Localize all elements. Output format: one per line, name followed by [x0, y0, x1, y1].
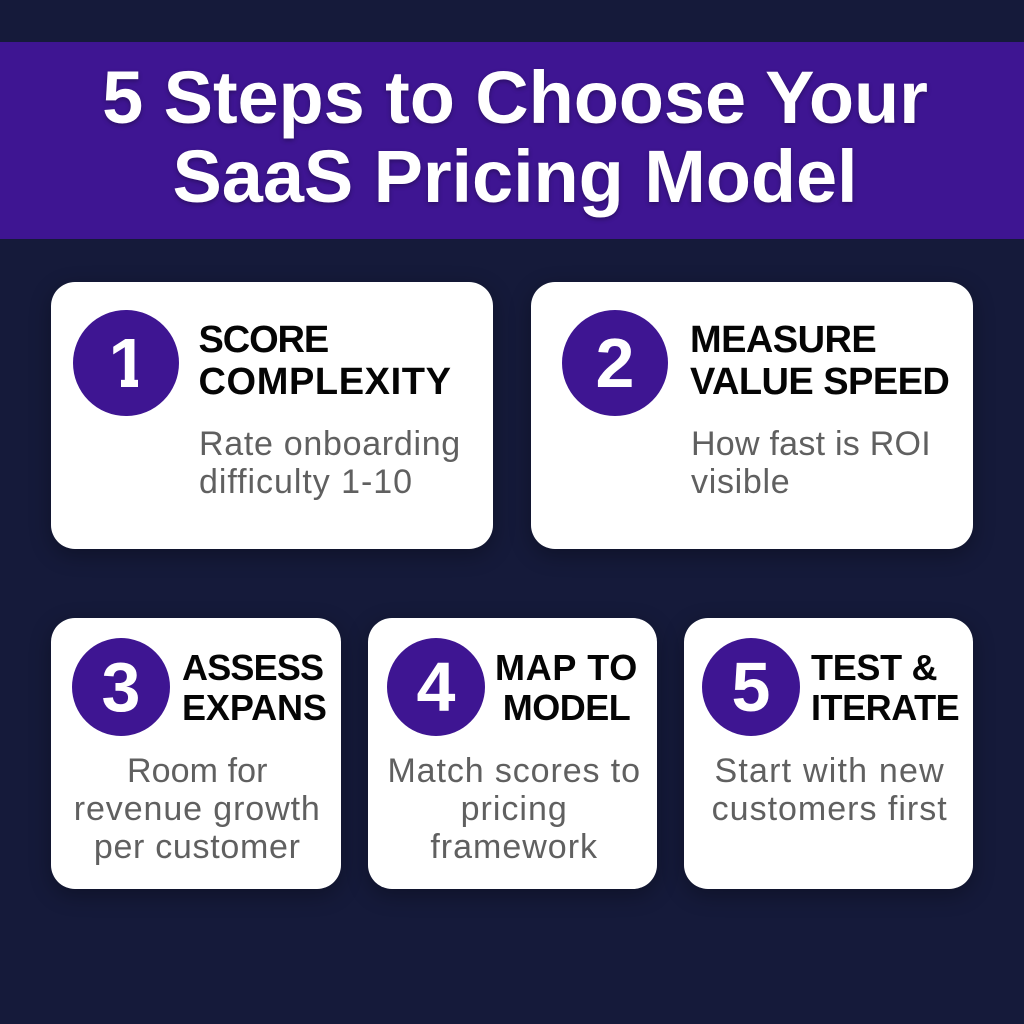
heading: measure value speed — [690, 319, 949, 403]
heading: measure value speed: VALUE SPEED — [690, 361, 949, 403]
heading: map to model: MAP TO — [495, 647, 638, 688]
heading: test and iterate — [811, 647, 959, 728]
number badge 4: 4 — [417, 648, 455, 726]
description 2: visible — [691, 463, 790, 501]
number badge 2 — [562, 310, 668, 416]
heading: map to model — [495, 647, 638, 728]
number badge 3 — [72, 638, 170, 736]
description 1 — [199, 425, 461, 501]
description 3: per customer — [94, 828, 301, 866]
description 4: framework — [430, 828, 598, 866]
number badge 1 — [73, 310, 179, 416]
heading: test and iterate: TEST & — [811, 647, 937, 688]
heading: test and iterate: ITERATE — [811, 687, 959, 728]
heading: assess expans: EXPANS — [182, 687, 327, 728]
number badge 3: 3 — [102, 648, 140, 726]
title banner — [0, 42, 1024, 239]
number badge 4 — [387, 638, 485, 736]
heading: score complexity: COMPLEXITY — [198, 361, 452, 403]
description 1: difficulty 1-10 — [199, 463, 413, 501]
number badge 2: 2 — [596, 324, 634, 402]
number badge 5 — [702, 638, 800, 736]
title line 2: SaaS Pricing Model — [173, 135, 857, 218]
description 5 — [712, 752, 948, 828]
description 4: pricing — [461, 790, 568, 828]
heading: assess expans: ASSESS — [182, 647, 323, 688]
panel: step 4 — [368, 618, 657, 889]
number badge 1: 1 — [109, 324, 147, 402]
heading: score complexity — [198, 319, 452, 403]
panel: step 1 — [51, 282, 493, 549]
panel: step 3 — [51, 618, 341, 889]
description 3: revenue growth — [74, 790, 321, 828]
description 1: Rate onboarding — [199, 425, 461, 463]
description 3: Room for — [127, 752, 268, 790]
description 4 — [387, 752, 641, 866]
number badge 5: 5 — [732, 648, 770, 726]
heading: map to model: MODEL — [503, 687, 630, 728]
description 5: Start with new — [715, 752, 945, 790]
description 3 — [74, 752, 321, 866]
description 2: How fast is ROI — [691, 425, 931, 463]
description 4: Match scores to — [387, 752, 641, 790]
panel: step 2 — [531, 282, 973, 549]
heading: measure value speed: MEASURE — [690, 319, 876, 361]
heading: score complexity: SCORE — [198, 319, 328, 361]
heading: assess expans — [182, 647, 327, 728]
description 2 — [691, 425, 931, 501]
panel: step 5 — [684, 618, 973, 889]
description 5: customers first — [712, 790, 948, 828]
title line 1: 5 Steps to Choose Your — [102, 56, 928, 139]
